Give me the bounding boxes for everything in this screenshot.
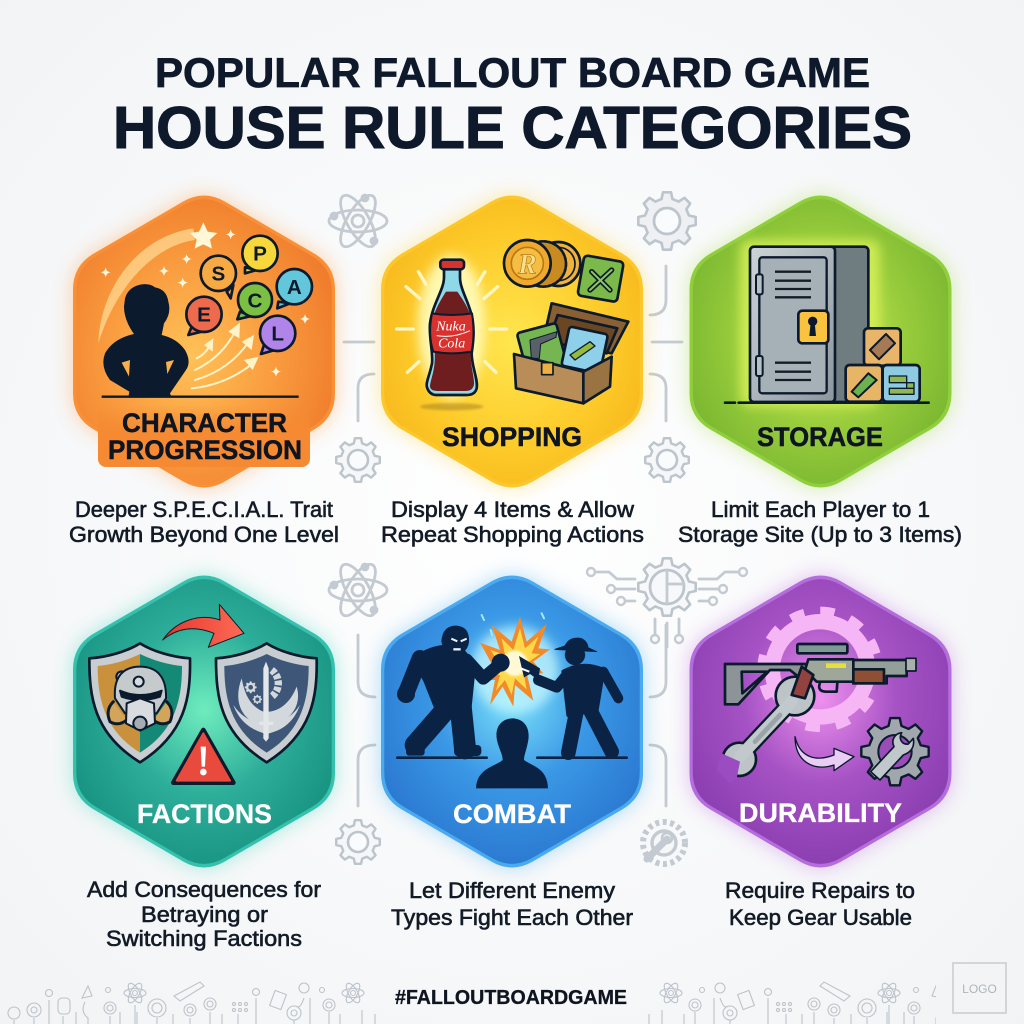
- silhouette: raider: [397, 626, 510, 756]
- text block: combat: Types Fight Each Other: [391, 905, 633, 930]
- icon: red switch arrow: [163, 604, 244, 647]
- silhouette: gunner: [538, 638, 618, 753]
- icon: nuka cola bottle: Cola: [438, 336, 465, 351]
- text block: durability: Keep Gear Usable: [729, 905, 912, 930]
- bubbles: special letters: E: [197, 304, 211, 327]
- heading: combat: COMBAT: [453, 799, 572, 829]
- icon: supply crates: [846, 328, 920, 402]
- icon: glowing gear backdrop: [763, 613, 877, 726]
- bubbles: special letters: S: [211, 263, 225, 286]
- heading: character progression: PROGRESSION: [108, 435, 302, 465]
- icon: gear upper right: [638, 192, 696, 250]
- panel: factions: [73, 576, 335, 868]
- heading: factions: FACTIONS: [137, 799, 272, 829]
- text block: character progression: Growth Beyond One Level: [69, 522, 339, 547]
- icon: wrench gear lower right: [643, 822, 685, 864]
- title: POPULAR FALLOUT BOARD GAME: [155, 49, 870, 96]
- panel: character progression: [73, 196, 335, 488]
- text block: factions: Switching Factions: [106, 926, 302, 951]
- icon: wrench: [717, 677, 814, 783]
- logo placeholder: LOGO: [962, 982, 997, 996]
- title: HOUSE RULE CATEGORIES: [113, 95, 912, 161]
- icon: atom upper left: [329, 190, 387, 252]
- icon: repaired gear: [861, 718, 929, 785]
- icon: gear middle left: [336, 438, 380, 482]
- text block: storage: [678, 497, 962, 547]
- heading: durability: DURABILITY: [739, 798, 902, 828]
- text block: shopping: [381, 497, 644, 547]
- heading: character progression: CHARACTER: [122, 408, 287, 438]
- illustration: character with special letters: [98, 222, 312, 397]
- bubbles: special letters: L: [271, 323, 284, 346]
- heading: shopping: SHOPPING: [442, 422, 582, 452]
- bubbles: special letters: A: [287, 276, 302, 299]
- text block: combat: Let Different Enemy: [409, 878, 615, 903]
- icon: locker: [740, 240, 880, 407]
- title: [113, 49, 912, 161]
- panel: storage: [690, 196, 952, 488]
- text block: durability: [725, 878, 915, 930]
- heading: storage: STORAGE: [757, 422, 883, 452]
- text block: character progression: [69, 497, 339, 547]
- bubbles: special letters: P: [253, 243, 267, 266]
- icon: atom lower left: [329, 559, 387, 621]
- icon: circuit gear: [587, 558, 747, 647]
- icon: nuka cola bottle: Nuka: [435, 320, 466, 335]
- icon: combat shotgun: [725, 644, 916, 704]
- panel: combat: [381, 576, 643, 868]
- heading: character progression: [108, 408, 302, 465]
- text block: storage: Limit Each Player to 1: [711, 497, 930, 522]
- text block: factions: Add Consequences for: [87, 877, 321, 902]
- icon: bottle cap coins: R: [517, 249, 537, 280]
- footer icon strip right: [648, 982, 936, 1024]
- icon: gear middle right: [645, 438, 689, 482]
- text block: storage: Storage Site (Up to 3 Items): [678, 522, 962, 547]
- icon: warning triangle: [173, 730, 233, 783]
- bubbles: special letters: C: [248, 289, 263, 312]
- text block: shopping: Display 4 Items & Allow: [391, 497, 634, 522]
- silhouette: character: [103, 284, 189, 397]
- silhouette: player: [476, 718, 548, 788]
- bubbles: special letters: [186, 236, 312, 354]
- icon: bottle cap coins: [504, 240, 624, 302]
- text block: factions: [87, 877, 321, 951]
- text block: combat: [391, 878, 633, 930]
- footer icon strip left: [8, 981, 375, 1024]
- text block: character progression: Deeper S.P.E.C.I.A.L. Trait: [75, 497, 333, 522]
- panel: shopping: [381, 196, 643, 488]
- icon: power armor shield: [89, 643, 190, 762]
- icon: brotherhood shield: [216, 643, 317, 762]
- icon: repair arrow: [795, 737, 854, 771]
- label background: [98, 405, 310, 467]
- text block: shopping: Repeat Shopping Actions: [381, 522, 644, 547]
- logo placeholder: [953, 963, 1006, 1013]
- background connector lines: [344, 266, 682, 806]
- text block: factions: Betraying or: [141, 902, 268, 927]
- hashtag: #FALLOUTBOARDGAME: [395, 987, 627, 1009]
- icon: explosion: [472, 613, 558, 713]
- icon: loot box: [514, 303, 628, 403]
- text block: durability: Require Repairs to: [725, 878, 915, 903]
- icon: gear lower left: [336, 820, 380, 864]
- icon: nuka cola bottle: [397, 255, 507, 410]
- panel: durability: [690, 576, 952, 868]
